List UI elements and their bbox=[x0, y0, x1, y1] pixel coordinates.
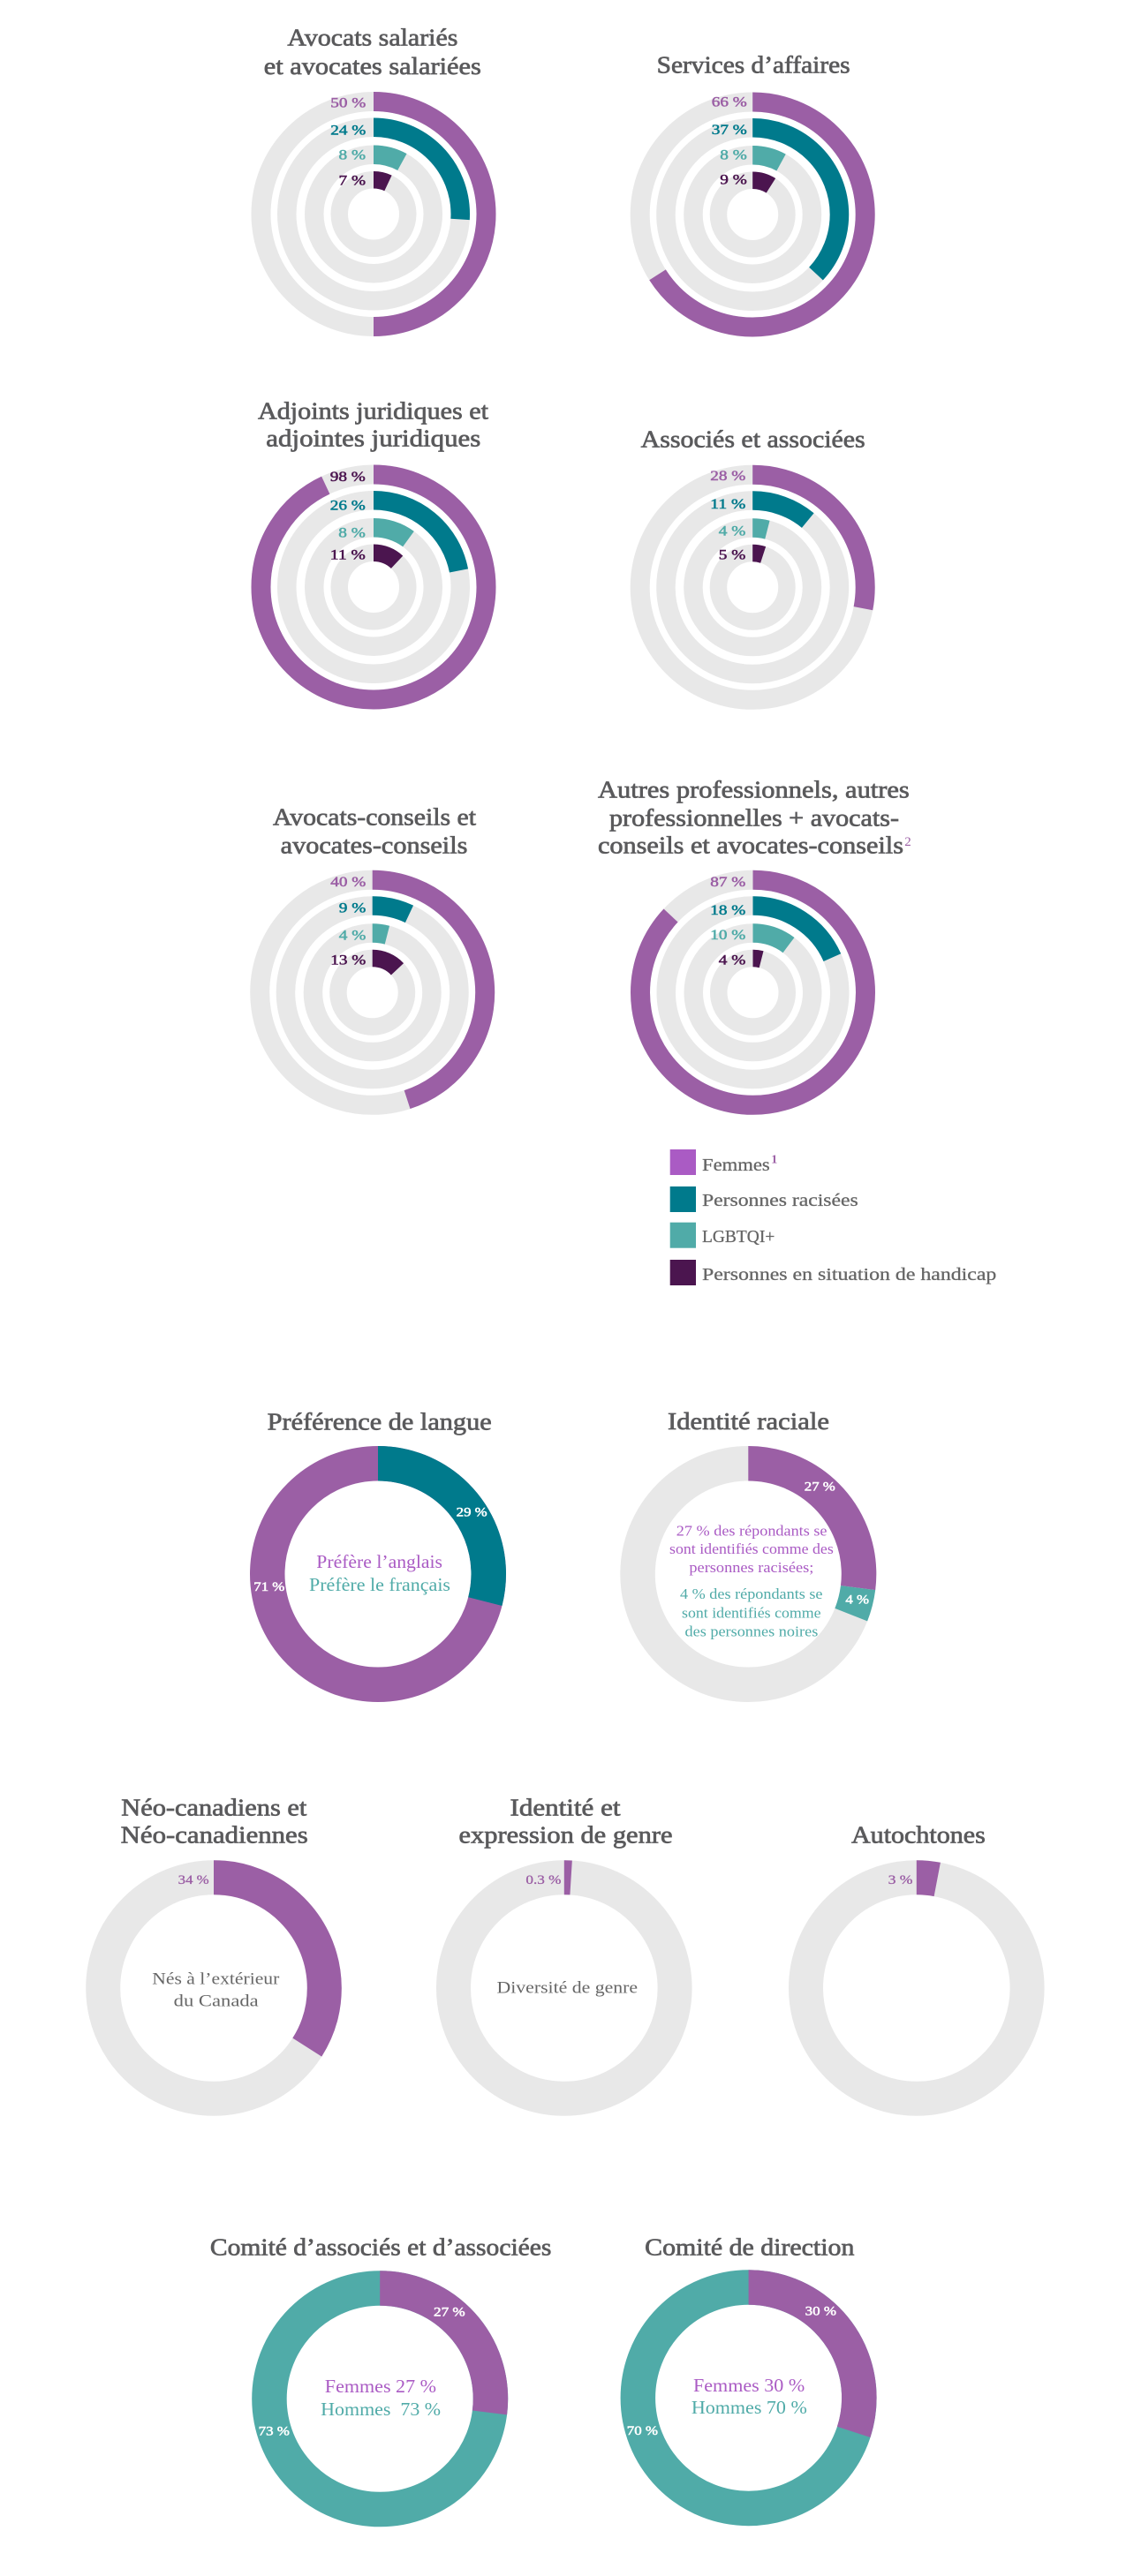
centre text: Diversité de genre bbox=[496, 1979, 638, 1998]
heading: adjointes juridiques bbox=[266, 425, 480, 451]
legend bbox=[670, 1149, 996, 1285]
heading bbox=[598, 777, 911, 859]
heading: Services d’affaires bbox=[657, 52, 850, 79]
donut labels bbox=[259, 2305, 465, 2439]
centre text: Hommes 73 % bbox=[321, 2399, 441, 2420]
heading bbox=[459, 1795, 673, 1849]
panel: néo-canadiens bbox=[103, 1795, 324, 2098]
percentage label: 34 % bbox=[178, 1873, 209, 1887]
centre text bbox=[152, 1970, 280, 2011]
legend: 1 bbox=[771, 1154, 777, 1167]
percentage labels: 9 % bbox=[339, 900, 366, 915]
donut chart bbox=[806, 1878, 1027, 2098]
centre text: des personnes noires bbox=[685, 1623, 818, 1639]
percentage labels: 13 % bbox=[330, 953, 366, 968]
legend: Personnes racisées bbox=[702, 1191, 858, 1210]
heading: Identité et bbox=[510, 1795, 621, 1821]
centre text: personnes racisées; bbox=[689, 1559, 813, 1576]
percentage labels: 37 % bbox=[712, 123, 747, 138]
centre text: sont identifiés comme bbox=[682, 1604, 821, 1621]
heading: Identité raciale bbox=[668, 1408, 829, 1435]
heading bbox=[273, 804, 477, 859]
centre text: Femmes 30 % bbox=[693, 2375, 805, 2396]
centre text: Nés à l’extérieur bbox=[152, 1970, 280, 1989]
heading: Néo-canadiennes bbox=[121, 1822, 308, 1849]
percentage labels: 28 % bbox=[710, 469, 745, 484]
donut labels: 30 % bbox=[805, 2304, 836, 2318]
centre text bbox=[309, 1551, 450, 1595]
radial chart bbox=[260, 880, 485, 1105]
legend: Femmes bbox=[702, 1156, 770, 1175]
donut labels: 27 % bbox=[805, 1480, 835, 1494]
donut chart bbox=[454, 1878, 675, 2098]
panel: associés bbox=[640, 426, 865, 700]
percentage labels bbox=[330, 875, 366, 968]
legend: LGBTQI+ bbox=[702, 1227, 775, 1247]
percentage labels bbox=[710, 875, 745, 968]
donut chart bbox=[638, 2287, 859, 2508]
panel: services d'affaires bbox=[640, 52, 865, 327]
percentage labels: 87 % bbox=[710, 875, 745, 890]
heading: professionnelles + avocats- bbox=[609, 804, 899, 831]
percentage labels: 10 % bbox=[710, 928, 745, 943]
donut chart bbox=[268, 1464, 488, 1684]
percentage labels: 11 % bbox=[330, 547, 366, 562]
percentage labels bbox=[330, 95, 366, 188]
centre text: 4 % des répondants se bbox=[680, 1586, 823, 1602]
heading: 2 bbox=[904, 835, 911, 849]
panel: avocats salariés bbox=[261, 25, 486, 327]
centre text: Préfère l’anglais bbox=[316, 1551, 442, 1572]
percentage labels: 18 % bbox=[710, 903, 745, 918]
radial chart bbox=[640, 475, 865, 700]
centre text: Préfère le français bbox=[309, 1574, 450, 1595]
percentage labels: 8 % bbox=[339, 148, 366, 163]
centre text bbox=[669, 1522, 834, 1639]
percentage labels: 4 % bbox=[719, 953, 745, 968]
donut labels bbox=[805, 1480, 869, 1608]
percentage labels: 26 % bbox=[330, 498, 366, 513]
heading: Adjoints juridiques et bbox=[258, 397, 489, 424]
percentage labels: 40 % bbox=[330, 875, 366, 890]
heading: Préférence de langue bbox=[268, 1408, 492, 1435]
heading: conseils et avocates-conseils bbox=[598, 832, 903, 859]
percentage labels: 24 % bbox=[330, 123, 366, 138]
percentage label: 0.3 % bbox=[525, 1873, 561, 1887]
percentage labels: 8 % bbox=[720, 148, 747, 163]
percentage labels: 4 % bbox=[719, 524, 745, 539]
percentage labels bbox=[330, 470, 366, 562]
centre text: Hommes 70 % bbox=[691, 2397, 807, 2418]
donut labels: 4 % bbox=[845, 1593, 869, 1608]
heading: Comité de direction bbox=[645, 2233, 855, 2260]
percentage labels: 9 % bbox=[720, 172, 747, 187]
radial chart bbox=[640, 880, 865, 1105]
heading bbox=[264, 25, 481, 79]
legend: Personnes en situation de handicap bbox=[702, 1265, 996, 1284]
percentage labels: 11 % bbox=[710, 497, 745, 512]
heading: Néo-canadiens et bbox=[121, 1795, 307, 1821]
donut chart bbox=[638, 1464, 859, 1684]
heading bbox=[258, 397, 489, 451]
panel: adjoints juridiques bbox=[258, 397, 489, 699]
panel: autochtones bbox=[806, 1822, 1027, 2098]
centre text: du Canada bbox=[174, 1992, 259, 2011]
radial chart bbox=[640, 102, 865, 327]
radial chart bbox=[261, 102, 486, 327]
heading: avocates-conseils bbox=[281, 832, 467, 859]
heading: Associés et associées bbox=[641, 426, 865, 453]
percentage labels: 4 % bbox=[339, 928, 366, 943]
donut chart bbox=[103, 1878, 324, 2098]
panel: comité de direction bbox=[627, 2233, 859, 2508]
centre text: sont identifiés comme des bbox=[669, 1540, 834, 1557]
donut labels: 71 % bbox=[253, 1580, 284, 1594]
donut labels: 73 % bbox=[259, 2425, 290, 2439]
donut labels: 27 % bbox=[434, 2305, 465, 2319]
donut labels: 29 % bbox=[457, 1505, 487, 1519]
radial chart bbox=[261, 475, 486, 699]
panel: identité raciale bbox=[638, 1408, 869, 1684]
percentage labels bbox=[710, 469, 745, 562]
donut labels bbox=[253, 1505, 487, 1594]
panel: comité d'associés bbox=[210, 2233, 551, 2510]
heading: Autres professionnels, autres bbox=[598, 777, 910, 803]
percentage labels: 50 % bbox=[330, 95, 366, 110]
centre text bbox=[321, 2376, 441, 2420]
heading: expression de genre bbox=[459, 1822, 673, 1849]
donut labels bbox=[627, 2304, 836, 2438]
percentage labels: 7 % bbox=[339, 173, 366, 188]
heading: Avocats salariés bbox=[287, 25, 457, 51]
panel: préférence de langue bbox=[253, 1408, 492, 1684]
panel: autres professionnels bbox=[598, 777, 911, 1105]
centre text: Femmes 27 % bbox=[325, 2376, 436, 2397]
heading: Avocats-conseils et bbox=[273, 804, 477, 831]
percentage labels: 98 % bbox=[330, 470, 366, 485]
donut labels: 70 % bbox=[627, 2424, 658, 2438]
donut chart bbox=[269, 2288, 490, 2510]
panel: avocats-conseils bbox=[260, 804, 485, 1105]
percentage labels: 66 % bbox=[712, 95, 747, 110]
heading: Comité d’associés et d’associées bbox=[210, 2233, 551, 2260]
percentage labels: 8 % bbox=[338, 525, 366, 540]
panel: identité et expression de genre bbox=[454, 1795, 675, 2098]
centre text bbox=[691, 2375, 807, 2418]
percentage label: 3 % bbox=[888, 1873, 913, 1887]
heading bbox=[121, 1795, 308, 1849]
heading: et avocates salariées bbox=[264, 53, 481, 79]
percentage labels bbox=[712, 95, 747, 187]
heading: Autochtones bbox=[851, 1822, 986, 1849]
centre text: 27 % des répondants se bbox=[676, 1522, 827, 1539]
percentage labels: 5 % bbox=[719, 547, 745, 562]
